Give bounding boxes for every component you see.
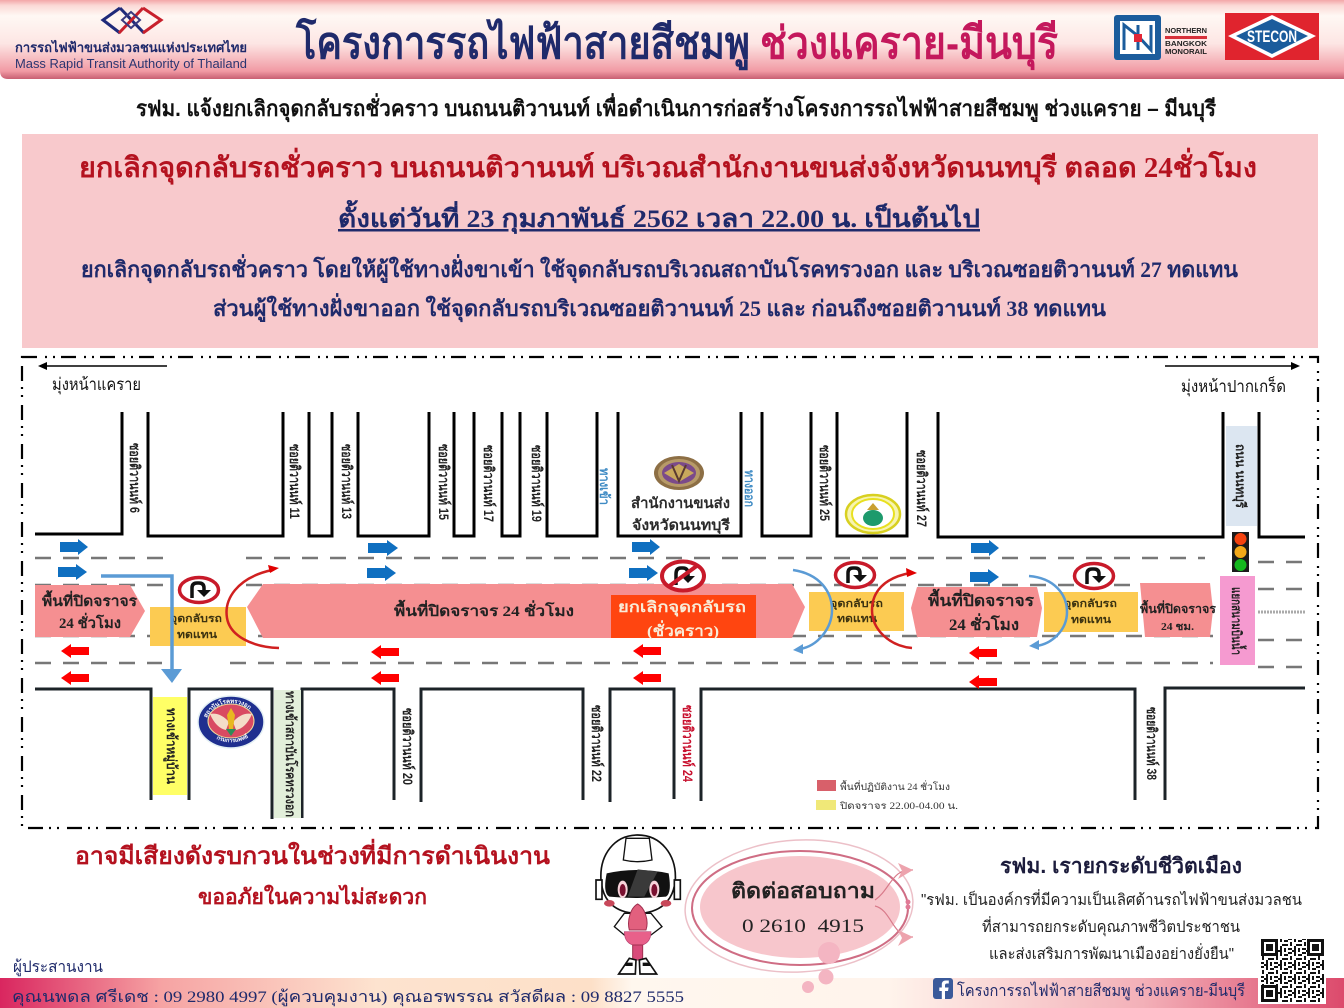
road edges: north side — [35, 412, 1305, 537]
cancelled U-turn box — [611, 595, 756, 640]
logo: Northern Bangkok Monorail: NORTHERN — [1165, 26, 1207, 35]
logo: Northern Bangkok Monorail — [1114, 15, 1208, 60]
cancelled U-turn box: (ชั่วคราว) — [647, 620, 719, 640]
direction arrow: Khae Rai: มุ่งหน้าแคราย — [52, 375, 141, 395]
closure zone 1 — [35, 585, 145, 637]
blue U-turn curve 2 — [1029, 576, 1067, 650]
logo: MRTA — [15, 8, 247, 71]
contact oval — [682, 834, 916, 993]
entry and exit labels — [597, 468, 757, 507]
cancelled U-turn box: ยกเลิกจุดกลับรถ — [618, 598, 746, 617]
soi labels: north: ซอยติวานนท์ 6 — [127, 443, 143, 513]
closure zone 4: พื้นที่ปิดจราจร — [1140, 599, 1217, 616]
closure zone 1: พื้นที่ปิดจราจร — [42, 590, 137, 610]
soi labels: south: ซอยติวานนท์ 38 — [1144, 707, 1160, 780]
replacement U-turn box 2: ทดแทน — [837, 614, 878, 625]
contact phone: 0 2610 4915 — [742, 916, 864, 937]
replacement U-turn box 1: จุดกลับรถ — [170, 613, 222, 626]
blue U-turn curve 1 — [793, 570, 832, 654]
title: โครงการรถไฟฟ้าสายสีชมพู — [295, 16, 750, 70]
facebook page name: โครงการรถไฟฟ้าสายสีชมพู ช่วงแคราย-มีนบุรี — [957, 981, 1245, 1001]
emblem: chest institute: กรมการแพทย์ — [216, 733, 248, 742]
logo: Northern Bangkok Monorail: MONORAIL — [1165, 47, 1207, 56]
sign: no U-turn — [662, 562, 704, 590]
replacement U-turn box 2 — [809, 592, 904, 631]
closure zone 3: 24 ชั่วโมง — [949, 613, 1019, 634]
direction arrow: Pak Kret — [1165, 362, 1300, 397]
logo: Northern Bangkok Monorail: BANGKOK — [1165, 39, 1208, 48]
replacement U-turn box 3: จุดกลับรถ — [1064, 598, 1117, 611]
slogan: และส่งเสริมการพัฒนาเมืองอย่างยั่งยืน" — [989, 943, 1234, 963]
outbound instruction: ส่วนผู้ใช้ทางฝั่งขาออก ใช้จุดกลับรถบริเวณซอยติวานนท์ 25 และ ก่อนถึงซอยติวานนท์ 38 ทดแทน — [213, 292, 1106, 323]
side road: chest institute entrance — [274, 690, 301, 818]
logo: MRTA: Mass Rapid Transit Authority of Thailand — [15, 57, 247, 71]
panel: road map — [20, 356, 1320, 830]
mascot — [596, 835, 680, 974]
closure zone 3: พื้นที่ปิดจราจร — [928, 588, 1034, 610]
entry and exit labels: ทางเข้า — [597, 468, 612, 505]
replacement U-turn box 1 — [150, 607, 246, 646]
soi labels: south: ซอยติวานนท์ 22 — [589, 705, 605, 782]
red U-turn curve 1 — [227, 565, 279, 648]
legend — [816, 780, 958, 812]
apology message — [75, 838, 551, 909]
blue detour arrow — [101, 576, 182, 683]
soi labels: north: ซอยติวานนท์ 27 — [914, 450, 930, 527]
transport office name: จังหวัดนนทบุรี — [632, 517, 730, 534]
transport office name: สำนักงานขนส่ง — [631, 495, 730, 512]
direction arrow: Khae Rai — [38, 362, 167, 395]
footer band — [0, 978, 1344, 1008]
sub heading: รฟม. แจ้งยกเลิกจุดกลับรถชั่วคราว บนถนนติวานนท์ เพื่อดำเนินการก่อสร้างโครงการรถไฟฟ้าสายสีชมพู ช่วงแคราย – มีนบุรี — [136, 92, 1216, 123]
icon: facebook — [933, 978, 953, 999]
emblem: chest institute: สถาบันโรคทรวงอก — [204, 698, 251, 718]
sign: U-turn 1 — [180, 578, 218, 602]
panel: announcement — [22, 134, 1318, 348]
emblem: chest institute — [197, 695, 265, 749]
logo: STECON — [1225, 13, 1319, 60]
traffic light — [1232, 532, 1249, 572]
soi labels: south — [400, 705, 1160, 785]
emblem: Nonthaburi transport office — [654, 456, 704, 490]
effective date: ตั้งแต่วันที่ 23 กุมภาพันธ์ 2562 เวลา 22.00 น. เป็นต้นไป — [338, 199, 980, 235]
road edges: south side — [35, 688, 1305, 819]
soi labels: north — [127, 443, 930, 527]
coordinator contacts: คุณนพดล ศรีเดช : 09 2980 4997 (ผู้ควบคุมงาน) คุณอรพรรณ สวัสดีผล : 09 8827 5555 — [12, 988, 684, 1007]
coordinator label: ผู้ประสานงาน — [13, 958, 103, 977]
soi labels: north: ซอยติวานนท์ 25 — [817, 445, 833, 521]
closure zone 4 — [1140, 583, 1217, 637]
red U-turn curve 2 — [872, 568, 917, 648]
side road: chest institute entrance: ทางเข้าสถาบันโรคทรวงอก — [283, 691, 300, 817]
logo: STECON: STECON — [1247, 27, 1297, 46]
junction label: แยกสนามบินน้ำ — [1229, 587, 1247, 655]
slogan — [921, 854, 1302, 963]
closure zone 1: 24 ชั่วโมง — [59, 612, 121, 632]
transport office name — [631, 495, 730, 534]
junction label — [1220, 576, 1255, 665]
replacement U-turn box 3 — [1044, 592, 1138, 632]
soi labels: north: ซอยติวานนท์ 15 — [436, 444, 452, 520]
sign: U-turn 3 — [1074, 564, 1114, 588]
legend: พื้นที่ปฏิบัติงาน 24 ชั่วโมง — [840, 780, 950, 793]
legend: ปิดจราจร 22.00-04.00 น. — [839, 801, 958, 812]
apology message: อาจมีเสียงดังรบกวนในช่วงที่มีการดำเนินงาน — [75, 838, 551, 870]
side road: Nonthaburi: ถนน นนทบุรี — [1232, 444, 1248, 509]
entry and exit labels: ทางออก — [742, 470, 757, 507]
soi labels: north: ซอยติวานนท์ 17 — [481, 445, 497, 522]
soi labels: south: ซอยติวานนท์ 20 — [400, 708, 416, 785]
logo: MRTA: การรถไฟฟ้าขนส่งมวลชนแห่งประเทศไทย — [15, 39, 247, 55]
QR code — [1258, 936, 1326, 1004]
replacement U-turn box 3: ทดแทน — [1071, 615, 1112, 626]
closure zone 2: main: พื้นที่ปิดจราจร 24 ชั่วโมง — [394, 599, 574, 620]
closure zone 2: main — [247, 584, 805, 638]
soi labels: south: ซอยติวานนท์ 24 — [680, 705, 696, 782]
side road: Nonthaburi — [1226, 426, 1257, 526]
slogan: "รฟม. เป็นองค์กรที่มีความเป็นเลิศด้านรถไฟฟ้าขนส่งมวลชน — [921, 889, 1302, 909]
contact heading: ติดต่อสอบถาม — [731, 880, 875, 903]
closure zone 3 — [911, 587, 1042, 637]
blue traffic arrows — [58, 539, 999, 585]
soi labels: north: ซอยติวานนท์ 19 — [529, 445, 545, 522]
side road: village entrance — [153, 697, 187, 795]
replacement U-turn box 1: ทดแทน — [177, 630, 218, 641]
emblem: green and yellow seal — [846, 495, 900, 533]
title accent: ช่วงแคราย-มีนบุรี — [760, 19, 1058, 71]
closure zone 4: 24 ชม. — [1161, 622, 1195, 633]
direction arrow: Pak Kret: มุ่งหน้าปากเกร็ด — [1181, 375, 1286, 397]
slogan: รฟม. เรายกระดับชีวิตเมือง — [1000, 854, 1242, 878]
red traffic arrows — [61, 644, 997, 689]
inbound instruction: ยกเลิกจุดกลับรถชั่วคราว โดยให้ผู้ใช้ทางฝั่งขาเข้า ใช้จุดกลับรถบริเวณสถาบันโรคทรวงอก และ บริเวณซอยติวานนท์ 27 ทดแทน — [81, 253, 1238, 284]
side road: village entrance: ทางเข้าหมู่บ้าน — [163, 708, 179, 785]
slogan: ที่สามารถยกระดับคุณภาพชีวิตประชาชน — [982, 916, 1240, 937]
announcement heading: ยกเลิกจุดกลับรถชั่วคราว บนถนนติวานนท์ บริเวณสำนักงานขนส่งจังหวัดนนทบุรี ตลอด 24ชั่วโมง — [79, 147, 1257, 185]
sign: U-turn 2 — [836, 562, 874, 588]
replacement U-turn box 2: จุดกลับรถ — [830, 598, 883, 611]
apology message: ขออภัยในความไม่สะดวก — [198, 884, 427, 909]
soi labels: north: ซอยติวานนท์ 11 — [287, 444, 303, 519]
lane dashes — [35, 558, 1302, 667]
soi labels: north: ซอยติวานนท์ 13 — [339, 444, 355, 519]
header band — [0, 0, 1344, 79]
